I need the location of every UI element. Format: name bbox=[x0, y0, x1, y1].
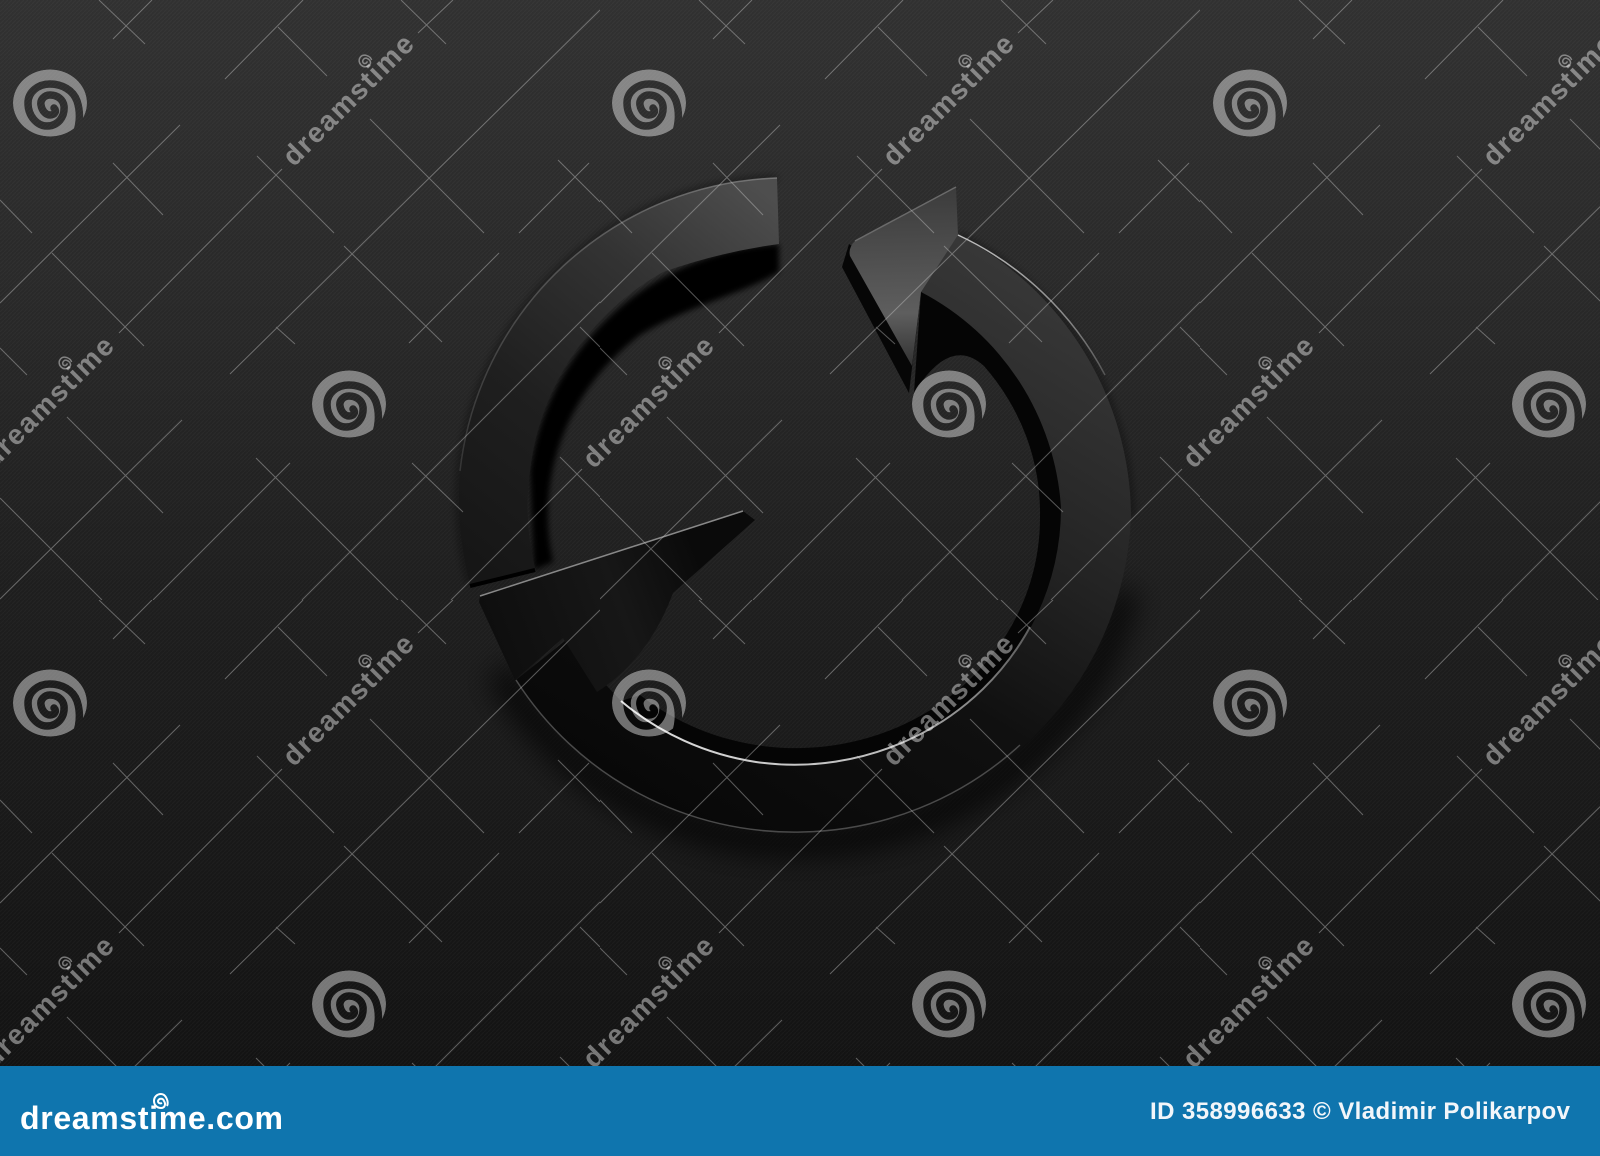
arrowhead on the right, side wall bbox=[842, 244, 921, 393]
black inner wall, left bbox=[530, 244, 779, 570]
image id and author credit: ID 358996633 © Vladimir Polikarpov bbox=[1150, 1098, 1571, 1125]
blue footer bar bbox=[0, 1066, 1600, 1156]
watermark wordmarks: dreamstime bbox=[576, 930, 720, 1074]
upper segment outer highlight bbox=[460, 178, 777, 471]
watermark wordmarks: dreamstime bbox=[876, 28, 1020, 172]
black inner wall, right bbox=[621, 292, 1061, 766]
lower right ring segment bbox=[516, 235, 1131, 832]
outer hairline bottom bbox=[516, 680, 1020, 832]
watermark wordmarks: dreamstime bbox=[1176, 930, 1320, 1074]
lower left arrowhead top highlight bbox=[480, 511, 743, 596]
dark rim around the ring bbox=[459, 178, 1131, 584]
watermark wordmarks: dreamstime bbox=[276, 628, 420, 772]
arrowhead highlight bbox=[855, 187, 956, 241]
watermark wordmarks: dreamstime bbox=[1176, 330, 1320, 474]
watermark wordmarks: dreamstime bbox=[576, 330, 720, 474]
watermark wordmarks: dreamstime bbox=[876, 628, 1020, 772]
icon: circular double arrow bbox=[459, 178, 1131, 832]
footer logo wordmark: dreamstime.com bbox=[20, 1100, 283, 1136]
bright inner hairline bbox=[621, 627, 1030, 765]
outer hairline upper right bbox=[958, 235, 1105, 375]
soft shadow under the ring bbox=[500, 590, 1125, 842]
watermark wordmarks: dreamstime bbox=[276, 28, 420, 172]
upper left ring segment bbox=[459, 178, 779, 584]
upper segment end shadow bbox=[470, 570, 535, 586]
footer logo spiral bbox=[154, 1094, 168, 1108]
lower left arrowhead bbox=[479, 511, 755, 692]
arrowhead on the right, top face bbox=[850, 187, 958, 366]
